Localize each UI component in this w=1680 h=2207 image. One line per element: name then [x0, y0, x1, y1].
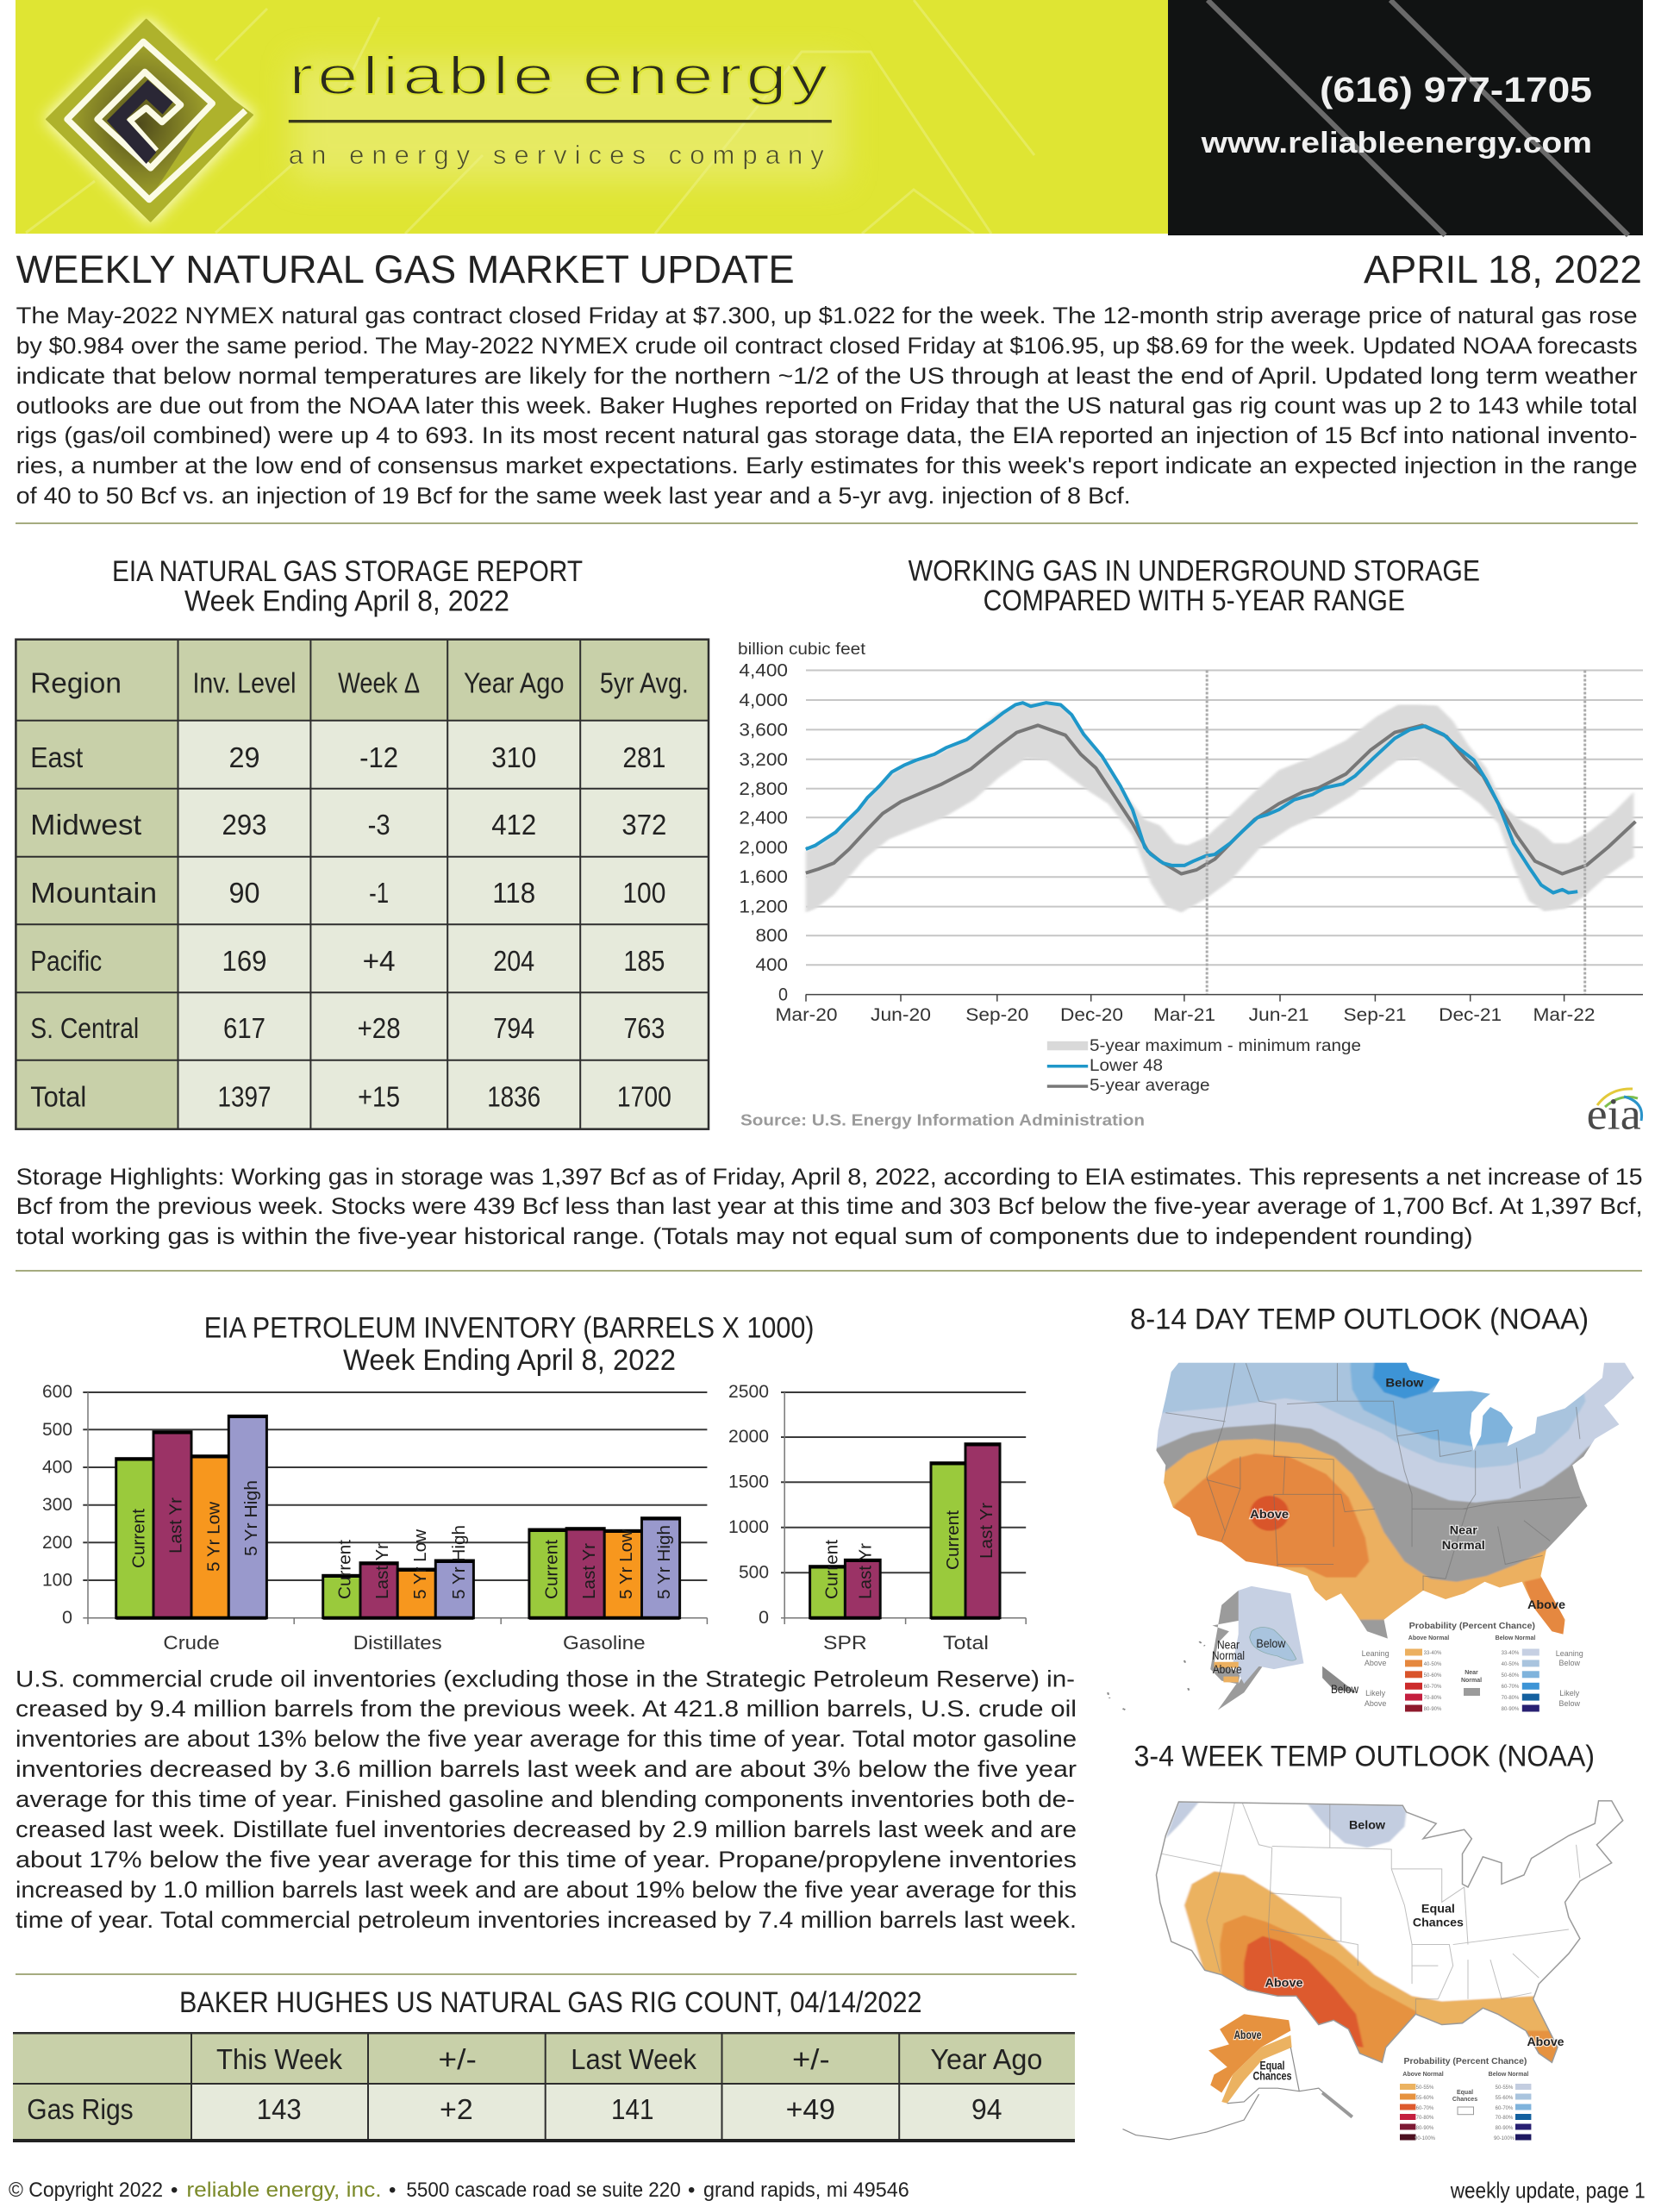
- map legend: Near: [1465, 1670, 1478, 1676]
- map legend: Likely: [1559, 1689, 1580, 1697]
- y axis labels: 400: [42, 1457, 72, 1478]
- row: East: 310: [491, 741, 536, 773]
- bar labels: 5 Yr Low: [410, 1529, 430, 1599]
- intro paragraph: [16, 303, 1638, 509]
- bars: gasoline: [529, 1518, 680, 1618]
- row: Total: 1700: [617, 1080, 671, 1112]
- y axis labels: 600: [42, 1382, 72, 1402]
- rig table header: [216, 2043, 1042, 2075]
- category labels: SPR: [823, 1632, 867, 1654]
- map legend: 50-60%: [1502, 1673, 1520, 1679]
- map legend: [1400, 2057, 1531, 2141]
- heading: petroleum inventory: [204, 1312, 814, 1377]
- bar labels: Last Yr: [579, 1543, 599, 1599]
- petroleum paragraph: [16, 1666, 1077, 1933]
- row: S. Central: [30, 1012, 665, 1044]
- storage highlights text: Storage Highlights: Working gas in storage was 1,397 Bcf as of Friday, April 8, 2022, according to EIA estimates. This represents a net increase of 15: [16, 1164, 1643, 1190]
- bars: total: [931, 1444, 1000, 1618]
- rig table header: +/-: [438, 2043, 477, 2075]
- category labels: [163, 1632, 646, 1654]
- y axis unit label: billion cubic feet: [738, 641, 866, 659]
- category labels: Crude: [163, 1632, 220, 1654]
- footer: copyright line: •: [688, 2179, 695, 2202]
- chart legend: [1047, 1037, 1361, 1095]
- map legend: 70-80%: [1416, 2116, 1434, 2121]
- map legend: Probability (Percent Chance): [1409, 1622, 1535, 1631]
- brand rule: [289, 120, 832, 122]
- map legend: 90-100%: [1494, 2136, 1515, 2141]
- Alaska bands: [1108, 1586, 1356, 1711]
- row: Midwest: -3: [368, 809, 390, 841]
- x axis labels: Sep-20: [965, 1005, 1028, 1025]
- bar chart: SPR and total: [728, 1382, 1026, 1654]
- row: Midwest: 372: [621, 809, 666, 841]
- map legend: 80-90%: [1496, 2126, 1514, 2131]
- y axis labels: 100: [42, 1571, 72, 1590]
- category labels: Distillates: [353, 1632, 442, 1654]
- row: Mountain: Mountain: [30, 877, 157, 909]
- map legend: Above Normal: [1408, 1635, 1449, 1641]
- y axis labels: 2500: [728, 1382, 769, 1402]
- y axis labels: 200: [42, 1533, 72, 1553]
- y axis labels: 1500: [728, 1472, 769, 1491]
- row: Mountain: 90: [229, 877, 260, 909]
- map labels: Above: [1527, 1597, 1565, 1611]
- petroleum paragraph: creased last week. Distillate fuel inventories decreased by 2.9 million barrels last week and are: [16, 1816, 1077, 1842]
- petroleum paragraph: inventories are about 13% below the five year average for this time of year. Total motor gasoline: [16, 1726, 1077, 1752]
- heading: working gas chart: [909, 555, 1480, 617]
- heading: storage report: EIA NATURAL GAS STORAGE REPORT: [112, 555, 583, 588]
- row: Total: 1397: [217, 1080, 271, 1112]
- heading: petroleum inventory: EIA PETROLEUM INVENTORY (BARRELS X 1000): [204, 1312, 814, 1345]
- y axis labels: 400: [755, 955, 788, 975]
- title: WEEKLY NATURAL GAS MARKET UPDATE: [16, 247, 795, 291]
- map: 3-4 week temperature outlook: [1122, 1793, 1655, 2141]
- table: natural gas storage: [16, 640, 709, 1129]
- 5-year range band: [806, 703, 1633, 913]
- bar labels: [128, 1480, 674, 1599]
- map legend: 33-40%: [1502, 1651, 1520, 1656]
- petroleum paragraph: about 17% below the five year average for this time of year. Propane/propylene inventories: [16, 1847, 1077, 1873]
- row: Pacific: Pacific: [30, 945, 102, 977]
- map legend: 70-80%: [1496, 2116, 1514, 2121]
- map legend: 80-90%: [1502, 1707, 1520, 1712]
- y axis labels: 500: [42, 1420, 72, 1440]
- chart legend: 5-year maximum - minimum range: [1090, 1037, 1361, 1055]
- chart legend: 5-year average: [1090, 1077, 1210, 1095]
- row: S. Central: S. Central: [30, 1012, 139, 1044]
- row: S. Central: +28: [358, 1012, 401, 1044]
- heading: storage report: Week Ending April 8, 2022: [184, 585, 509, 618]
- map legend: 55-60%: [1416, 2096, 1434, 2101]
- y axis labels: 4,400: [739, 660, 788, 681]
- map legend: Leaning: [1556, 1649, 1583, 1658]
- y axis labels: 3,200: [739, 750, 788, 770]
- phone number: (616) 977-1705: [1320, 70, 1592, 109]
- map legend: Above: [1365, 1659, 1386, 1667]
- map labels: Above: [1250, 1507, 1289, 1521]
- x axis labels: Jun-20: [871, 1005, 931, 1025]
- rig table header: +/-: [792, 2043, 830, 2075]
- map legend: 70-80%: [1424, 1696, 1442, 1701]
- petroleum paragraph: creased by 9.4 million barrels from the previous week. At 421.8 million barrels, U.S. crude oil: [16, 1696, 1077, 1722]
- banner: black panel: [1168, 0, 1643, 235]
- rig table row: [27, 2093, 1002, 2125]
- row: Pacific: +4: [363, 945, 396, 977]
- map legend: Below Normal: [1489, 2072, 1528, 2078]
- row: Total: [30, 1080, 671, 1112]
- bar labels: 5 Yr Low: [204, 1502, 224, 1572]
- bar top caps and baselines: [810, 1445, 1000, 1618]
- heading: 3-4 week outlook: 3-4 WEEK TEMP OUTLOOK (NOAA): [1134, 1741, 1595, 1773]
- row: East: [30, 741, 665, 773]
- category labels: [823, 1632, 989, 1654]
- row: Midwest: [30, 809, 666, 841]
- row: S. Central: 794: [493, 1012, 534, 1044]
- storage highlights text: total working gas is within the five-year historical range. (Totals may not equal sum of components due to independent rounding): [16, 1223, 1473, 1249]
- heading: 8-14 day outlook: 8-14 DAY TEMP OUTLOOK (NOAA): [1130, 1303, 1589, 1335]
- state borders: [1165, 1363, 1580, 1591]
- x axis labels: Mar-21: [1153, 1005, 1215, 1025]
- Alaska bands: [1122, 2014, 1352, 2140]
- map labels: Near: [1217, 1638, 1240, 1652]
- map labels: Above: [1265, 1976, 1303, 1990]
- rig table row: +2: [440, 2093, 473, 2125]
- bar labels: Last Yr: [977, 1503, 996, 1559]
- row: East: 29: [229, 741, 260, 773]
- map labels: Below: [1256, 1636, 1286, 1650]
- map legend: [1362, 1622, 1583, 1712]
- y axis labels: 0: [62, 1608, 72, 1628]
- table header row: Year Ago: [464, 667, 564, 699]
- table header row: Region: [30, 667, 122, 699]
- map legend: Above Normal: [1402, 2072, 1444, 2078]
- map legend: 80-90%: [1416, 2126, 1434, 2131]
- map legend: 50-55%: [1416, 2085, 1434, 2091]
- bar chart: crude, distillates, gasoline: [42, 1382, 707, 1654]
- heading: rig count: BAKER HUGHES US NATURAL GAS RIG COUNT, 04/14/2022: [179, 1986, 922, 2019]
- map labels: Above: [1234, 2028, 1262, 2041]
- intro paragraph: of 40 to 50 Bcf vs. an injection of 19 Bcf for the same week last year and a 5-yr avg. injection of 8 Bcf.: [16, 483, 1131, 509]
- row: Total: +15: [358, 1080, 400, 1112]
- map labels: Below: [1331, 1682, 1359, 1696]
- map legend: Below: [1559, 1699, 1581, 1708]
- y axis labels: [728, 1382, 769, 1628]
- y axis labels: 0: [759, 1608, 769, 1628]
- y axis labels: 1,600: [739, 867, 788, 887]
- bar labels: [821, 1503, 996, 1599]
- footer: copyright line: © Copyright 2022: [9, 2179, 163, 2202]
- bar labels: 5 Yr Low: [616, 1529, 636, 1599]
- table header row: Week Δ: [338, 667, 420, 699]
- rig table row: 143: [257, 2093, 302, 2125]
- chart source: Source: U.S. Energy Information Administration: [740, 1112, 1145, 1129]
- bar labels: Last Yr: [166, 1497, 186, 1554]
- table header row: Inv. Level: [193, 667, 297, 699]
- y axis labels: 2,000: [739, 838, 788, 858]
- row: S. Central: 617: [223, 1012, 265, 1044]
- petroleum paragraph: increased by 1.0 million barrels last week and are about 19% below the five year average for this: [16, 1877, 1077, 1903]
- category labels: Total: [943, 1632, 989, 1654]
- row: Pacific: [30, 945, 665, 977]
- bar labels: Last Yr: [372, 1543, 392, 1599]
- petroleum paragraph: time of year. Total commercial petroleum inventories increased by 7.4 million barrels last week.: [16, 1907, 1077, 1933]
- row: East: East: [30, 741, 83, 773]
- bars: distillates: [323, 1560, 473, 1618]
- icon: reliable energy logo: [44, 17, 255, 224]
- map legend: Leaning: [1362, 1649, 1390, 1658]
- map legend: 60-70%: [1496, 2106, 1514, 2111]
- map labels: Chances: [1253, 2068, 1292, 2082]
- y axis labels: 0: [778, 985, 788, 1005]
- row: Midwest: Midwest: [30, 809, 141, 841]
- map legend: 80-90%: [1424, 1707, 1442, 1712]
- intro paragraph: indicate that below normal temperatures are likely for the northern ~1/2 of the US through at least the end of April. Updated long term weather: [16, 363, 1638, 389]
- storage highlights text: Bcf from the previous week. Stocks were 439 Bcf less than last year at this time and 303 Bcf below the five-year average of 1,700 Bcf. At 1,397 Bcf,: [16, 1193, 1643, 1219]
- contiguous US bands: [1132, 1793, 1655, 2096]
- heading: working gas chart: WORKING GAS IN UNDERGROUND STORAGE: [909, 555, 1480, 588]
- map labels: Below: [1349, 1818, 1385, 1832]
- map legend: Below: [1559, 1659, 1581, 1667]
- map labels: Normal: [1442, 1538, 1485, 1552]
- map legend: 90-100%: [1415, 2136, 1436, 2141]
- row: Total: 1836: [487, 1080, 540, 1112]
- row: Midwest: 293: [222, 809, 267, 841]
- map legend: 40-50%: [1502, 1662, 1520, 1667]
- row: S. Central: 763: [623, 1012, 665, 1044]
- footer: copyright line: reliable energy, inc.: [186, 2179, 382, 2202]
- intro paragraph: outlooks are due out from the NOAA later this week. Baker Hughes reported on Friday that the US natural gas rig count was up 2 to 143 while total: [16, 393, 1638, 419]
- intro paragraph: by $0.984 over the same period. The May-2022 NYMEX crude oil contract closed Friday at $106.95, up $8.69 for the week. Updated NOAA forecasts: [16, 333, 1638, 359]
- map legend: Below Normal: [1496, 1635, 1535, 1641]
- y axis labels: 800: [755, 926, 788, 946]
- map legend: 60-70%: [1424, 1685, 1442, 1690]
- map legend: Normal: [1461, 1678, 1482, 1684]
- map legend: 50-60%: [1424, 1673, 1442, 1679]
- y axis labels: 4,000: [739, 691, 788, 710]
- map labels: Below: [1385, 1375, 1424, 1389]
- bar labels: Current: [943, 1510, 963, 1570]
- Lower 48 line: [806, 703, 1577, 893]
- map legend: Chances: [1452, 2097, 1477, 2103]
- map legend: 55-60%: [1496, 2096, 1514, 2101]
- map legend: 50-55%: [1496, 2085, 1514, 2091]
- table header row: 5yr Avg.: [600, 667, 689, 699]
- map labels: Chances: [1413, 1916, 1464, 1929]
- x axis labels: Mar-20: [776, 1005, 838, 1025]
- banner: yellow panel: [16, 0, 1168, 234]
- category labels: Gasoline: [563, 1632, 646, 1654]
- heading: petroleum inventory: Week Ending April 8, 2022: [343, 1344, 676, 1377]
- map labels: Equal: [1260, 2058, 1284, 2072]
- bar labels: Current: [541, 1540, 562, 1599]
- rig table header: This Week: [216, 2043, 342, 2075]
- heading: storage report: [112, 555, 583, 618]
- row: East: 281: [622, 741, 665, 773]
- rig table row: +49: [786, 2093, 835, 2125]
- footer: page number: weekly update, page 1: [1450, 2178, 1646, 2204]
- map legend: Probability (Percent Chance): [1403, 2057, 1527, 2066]
- brand name: reliable energy: [289, 47, 832, 106]
- US outline: [1156, 1801, 1623, 2062]
- rig table row: 94: [971, 2093, 1002, 2125]
- row: Midwest: 412: [491, 809, 536, 841]
- petroleum paragraph: inventories decreased by 3.6 million barrels last week and are about 3% below the five year: [16, 1756, 1077, 1782]
- x axis labels: Mar-22: [1533, 1005, 1595, 1025]
- 5-year average line: [806, 725, 1635, 874]
- intro paragraph: rigs (gas/oil combined) were up 4 to 693. In its most recent natural gas storage data, the EIA reported an injection of 15 Bcf into national invento-: [16, 422, 1638, 448]
- rig table header: Last Week: [571, 2043, 696, 2075]
- map legend: 60-70%: [1416, 2106, 1434, 2111]
- row: Total: Total: [30, 1080, 86, 1112]
- map labels: Above: [1213, 1662, 1242, 1676]
- y axis labels: 2,800: [739, 779, 788, 799]
- website: www.reliableenergy.com: [1200, 127, 1592, 159]
- table header row: [30, 667, 689, 699]
- rig table row: Gas Rigs: [27, 2093, 134, 2125]
- row: East: -12: [359, 741, 398, 773]
- map: 8-14 day temperature outlook: [1108, 1343, 1655, 1712]
- footer: copyright line: [9, 2179, 909, 2202]
- bar labels: Current: [821, 1540, 841, 1599]
- footer: copyright line: 5500 cascade road se suite 220: [406, 2179, 681, 2202]
- table: rig count: [13, 2032, 1075, 2142]
- x axis labels: [776, 1005, 1595, 1025]
- bar labels: 5 Yr High: [241, 1480, 261, 1556]
- map labels: Normal: [1212, 1648, 1245, 1662]
- chart legend: Lower 48: [1090, 1057, 1163, 1075]
- map legend: Above: [1365, 1699, 1386, 1708]
- y axis labels: [739, 660, 788, 1005]
- petroleum paragraph: average for this time of year. Finished gasoline and blending components inventories both de-: [16, 1786, 1075, 1812]
- rig table header: Year Ago: [930, 2043, 1042, 2075]
- row: Pacific: 185: [623, 945, 665, 977]
- row: Pacific: 169: [222, 945, 267, 977]
- bar labels: Current: [128, 1509, 148, 1568]
- map legend: Likely: [1365, 1689, 1386, 1697]
- petroleum paragraph: U.S. commercial crude oil inventories (excluding those in the Strategic Petroleum Reserve) in-: [16, 1666, 1075, 1692]
- storage highlights text: [16, 1164, 1643, 1249]
- map legend: 60-70%: [1502, 1685, 1520, 1690]
- row: Mountain: [30, 877, 665, 909]
- x axis labels: Jun-21: [1249, 1005, 1309, 1025]
- state borders: [1162, 1803, 1580, 2014]
- bar labels: 5 Yr High: [449, 1525, 469, 1599]
- map labels: Near: [1450, 1523, 1477, 1537]
- header banner: [16, 0, 1643, 235]
- map labels: [1212, 1375, 1565, 1696]
- bars: SPR: [810, 1560, 880, 1618]
- heading: working gas chart: COMPARED WITH 5-YEAR RANGE: [984, 585, 1405, 617]
- x axis labels: Dec-20: [1060, 1005, 1123, 1025]
- y axis labels: 300: [42, 1495, 72, 1515]
- x axis labels: Sep-21: [1343, 1005, 1407, 1025]
- map legend: 70-80%: [1502, 1696, 1520, 1701]
- row: Pacific: 204: [493, 945, 534, 977]
- y axis labels: [42, 1382, 72, 1628]
- row: Mountain: -1: [369, 877, 389, 909]
- intro paragraph: ries, a number at the low end of consensus market expectations. Early estimates for this week's report indicate an expected injection in the range: [16, 453, 1638, 478]
- bar labels: Last Yr: [856, 1543, 876, 1599]
- icon: eia logo: eia: [1587, 1091, 1641, 1140]
- bars: crude: [116, 1416, 266, 1618]
- rig table row: 141: [611, 2093, 653, 2125]
- line chart: working gas in storage: [738, 641, 1643, 1140]
- date: APRIL 18, 2022: [1364, 247, 1642, 291]
- map legend: 33-40%: [1424, 1651, 1442, 1656]
- x axis labels: Dec-21: [1439, 1005, 1502, 1025]
- map labels: Above: [1527, 2035, 1564, 2048]
- footer: copyright line: grand rapids, mi 49546: [703, 2179, 909, 2202]
- y axis labels: 2,400: [739, 808, 788, 828]
- map labels: Equal: [1421, 1902, 1455, 1916]
- tagline: an energy services company: [289, 140, 824, 170]
- map legend: Equal: [1457, 2090, 1473, 2096]
- y axis labels: 2000: [728, 1427, 769, 1447]
- map labels: [1234, 1818, 1564, 2082]
- footer: copyright line: •: [389, 2179, 396, 2202]
- row: Mountain: 100: [622, 877, 665, 909]
- bar labels: 5 Yr High: [654, 1525, 674, 1599]
- y axis labels: 1,200: [739, 897, 788, 917]
- footer: copyright line: •: [171, 2179, 178, 2202]
- y axis labels: 1000: [728, 1517, 769, 1537]
- map legend: 40-50%: [1424, 1662, 1442, 1667]
- y axis labels: 3,600: [739, 720, 788, 740]
- contiguous US bands: [1132, 1343, 1655, 1663]
- y axis labels: 500: [739, 1562, 769, 1583]
- intro paragraph: The May-2022 NYMEX natural gas contract closed Friday at $7.300, up $1.022 for the week. The 12-month strip average price of natural gas rose: [16, 303, 1638, 328]
- row: Mountain: 118: [492, 877, 535, 909]
- bar labels: Current: [334, 1540, 355, 1599]
- bar top caps and baselines: [116, 1416, 680, 1618]
